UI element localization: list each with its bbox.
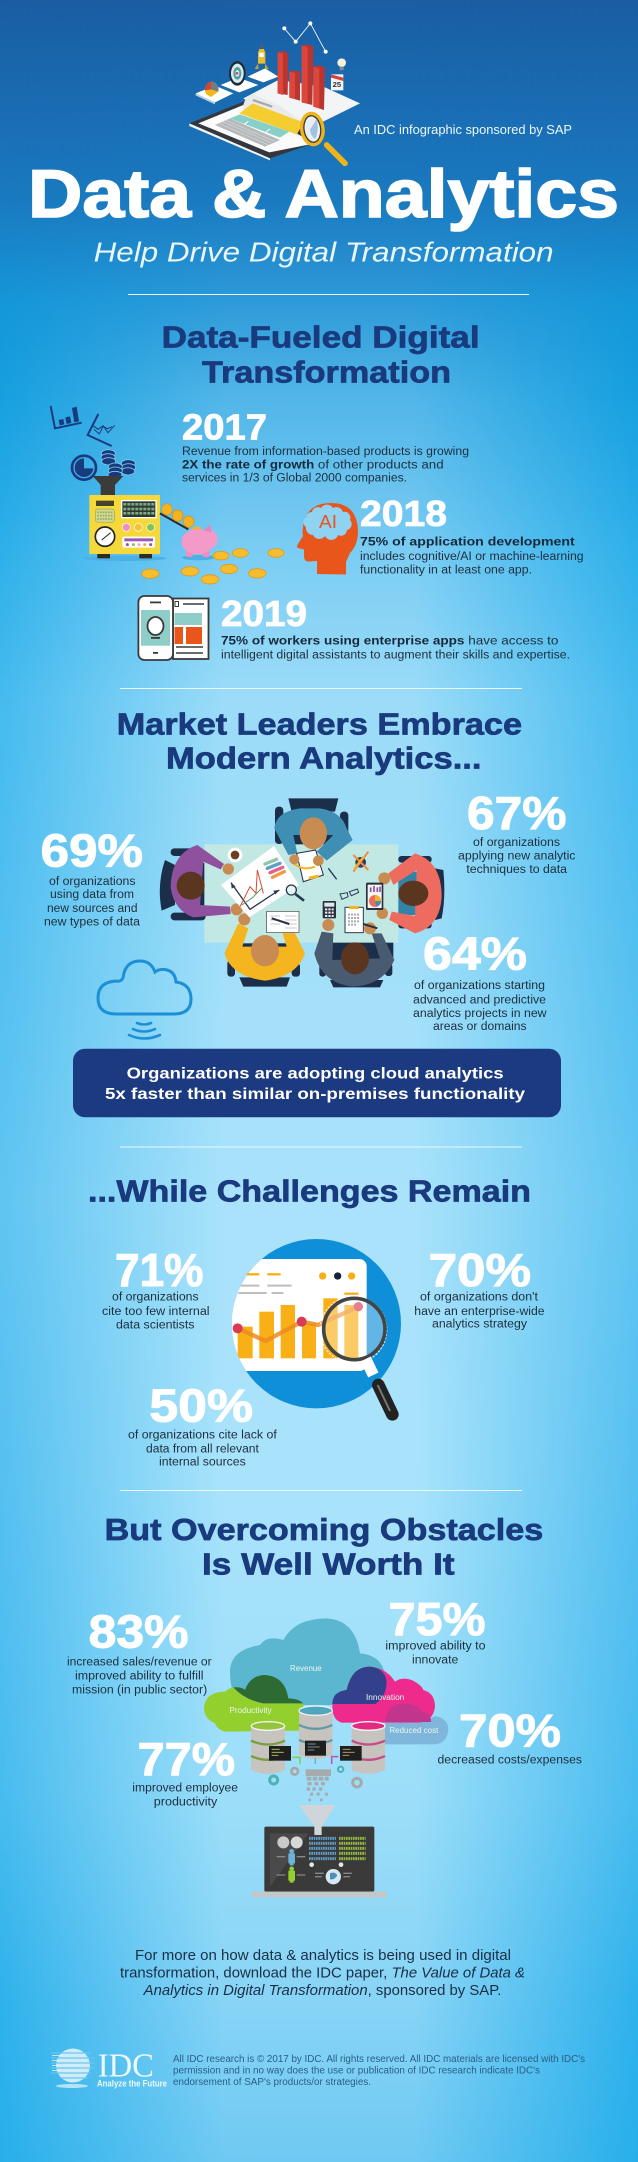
illustration: meeting table seen from above [160, 798, 444, 987]
stat: 83% [67, 1605, 212, 1696]
stat: 64%: 64% [423, 927, 527, 979]
text block: 2018 [360, 493, 584, 576]
stat: 69%: using data from [50, 889, 134, 901]
stat: 69%: of organizations [49, 876, 136, 888]
stat: 70% no strategy [414, 1244, 545, 1331]
database: middle [299, 1706, 332, 1759]
person: right, coral [377, 853, 444, 933]
heading: Market Leaders Embrace Modern Analytics [117, 706, 522, 775]
database: right [340, 1722, 385, 1774]
heading: But Overcoming Obstacles: But Overcoming Obstacles [105, 1512, 543, 1547]
closing call to action [120, 1948, 525, 1999]
text block: 2017: services in 1/3 of Global 2000 companies. [182, 473, 407, 485]
icon: coins on the floor [142, 549, 284, 584]
cloud: reduced cost: Reduced cost [389, 1726, 439, 1735]
stat: 50%: 50% [149, 1380, 253, 1432]
heading: But Overcoming Obstacles: Is Well Worth It [202, 1546, 455, 1581]
icon: cloud with wireless signal [98, 961, 191, 1038]
callout: cloud analytics: 5x faster than similar on-premises functionality [105, 1086, 525, 1103]
main title: Data & Analytics [28, 156, 619, 232]
heading: Market Leaders Embrace Modern Analytics: Modern Analytics... [166, 740, 482, 775]
cloud: reduced cost [385, 1716, 448, 1744]
cloud: innovation: Innovation [366, 1693, 404, 1702]
closing call to action: Analytics in Digital Transformation , sponsored by SAP. [143, 1983, 501, 1999]
bars [238, 1298, 358, 1358]
stat: 67% [458, 787, 576, 876]
chart on paper [221, 846, 299, 917]
tablet with charts [366, 883, 383, 910]
logo: IDC: Analyze the Future [97, 2079, 167, 2090]
text block: 2017 [182, 406, 469, 485]
person: bottom right, slate [314, 919, 394, 987]
legal notice [173, 2054, 585, 2088]
stat: 71%: of organizations [112, 1292, 199, 1304]
stat: 64%: areas or domains [433, 1021, 527, 1033]
laptop dashboard [252, 1827, 387, 1897]
stat: 75%: innovate [412, 1655, 458, 1667]
stat: 70% costs: decreased costs/expenses [438, 1755, 582, 1767]
stat: 69%: 69% [41, 825, 143, 877]
stat: 50% [128, 1380, 278, 1469]
stat: 70% no strategy: have an enterprise-wide [414, 1306, 545, 1318]
text block: 2018: functionality in at least one app. [360, 564, 532, 576]
header illustration: isometric tablet with charts: 25 [333, 80, 342, 89]
logo: IDC: IDC [98, 2048, 154, 2085]
icon: pie ring and coin stacks [72, 450, 136, 480]
text block: 2018: 2018 [360, 493, 447, 534]
stat: 69% [41, 825, 143, 929]
stat: 75%: 75% [389, 1593, 486, 1645]
stat: 83%: mission (in public sector) [72, 1684, 207, 1696]
illustration: benefit clouds feeding databases and laptop [204, 1618, 448, 1897]
heading: While Challenges Remain: ...While Challenges Remain [88, 1174, 531, 1209]
text block: 2019: 75% of workers using enterprise apps have access to [221, 635, 558, 647]
stat: 71% [102, 1244, 210, 1332]
notebook [267, 911, 299, 933]
calculator [323, 901, 336, 918]
stat: 77%: productivity [154, 1797, 218, 1809]
stat: 83%: improved ability to fulfill [75, 1671, 204, 1683]
callout: cloud analytics [73, 1049, 561, 1117]
trend line [238, 1307, 358, 1341]
stat: 50%: data from all relevant [146, 1444, 260, 1456]
icon: floating bar chart [51, 406, 82, 428]
connectors and gears [270, 1757, 361, 1787]
icon: AI head: AI [319, 512, 337, 532]
icon: data machine turning data into coins and piggy bank [51, 406, 284, 584]
stat: 77%: 77% [138, 1733, 235, 1785]
heading: Data-Fueled Digital Transformation: Data-Fueled Digital [162, 319, 480, 354]
icon: floating line chart [88, 414, 115, 446]
desk organiser [353, 852, 368, 872]
header illustration: isometric tablet with charts [189, 21, 360, 163]
stat: 75% [385, 1593, 486, 1667]
callout: cloud analytics: Organizations are adopting cloud analytics [127, 1065, 504, 1082]
stat: 64%: of organizations starting [414, 980, 545, 992]
stat: 75%: improved ability to [385, 1641, 486, 1653]
stat: 50%: of organizations cite lack of [128, 1430, 278, 1442]
magnifier [320, 1297, 392, 1414]
glasses [340, 889, 359, 899]
logo: IDC [51, 2048, 167, 2090]
stat: 67%: 67% [467, 787, 566, 839]
chart: analytics window under a magnifying glass [225, 1239, 401, 1414]
heading: Market Leaders Embrace Modern Analytics: Market Leaders Embrace [117, 706, 522, 741]
heading: Data-Fueled Digital Transformation: Transformation [202, 354, 451, 389]
stat: 50%: internal sources [159, 1457, 246, 1469]
legal notice: endorsement of SAP's products/or strategies. [173, 2077, 371, 2088]
text block: 2019 [221, 593, 570, 662]
stat: 77%: improved employee [132, 1783, 238, 1795]
table top [204, 844, 398, 943]
magnifier on table [286, 885, 304, 901]
person: bottom left, yellow [224, 913, 305, 987]
heading: But Overcoming Obstacles [105, 1512, 543, 1581]
person: top, blue [274, 798, 353, 882]
text block: 2019: intelligent digital assistants to augment their skills and expertise. [221, 650, 570, 662]
stat: 71%: 71% [115, 1244, 204, 1296]
legal notice: All IDC research is © 2017 by IDC. All rights reserved. All IDC materials are licensed with IDC's [173, 2054, 585, 2065]
text block: 2017: 2X the rate of growth of other products and [182, 460, 444, 472]
stat: 64% [413, 927, 547, 1033]
data pixels [306, 1769, 331, 1801]
coffee cup [228, 848, 242, 862]
stat: 70% no strategy: analytics strategy [432, 1319, 527, 1331]
heading: Data-Fueled Digital Transformation [162, 319, 480, 389]
stat: 70% no strategy: 70% [429, 1244, 531, 1296]
funnel [299, 1805, 336, 1835]
icon: phone and web page [138, 596, 208, 660]
cloud: revenue: Revenue [290, 1664, 322, 1673]
icon: AI head [297, 503, 358, 574]
legal notice: permission and in no way does the use or publication of IDC research indicate IDC's [173, 2065, 540, 2076]
subtitle: Help Drive Digital Transformation [94, 237, 554, 268]
clipboard right [345, 906, 377, 933]
stat: 71%: data scientists [116, 1320, 195, 1332]
cloud: revenue [230, 1618, 387, 1705]
text block: 2017: Revenue from information-based products is growing [182, 446, 469, 458]
cloud: productivity: Productivity [229, 1706, 272, 1715]
cloud: innovation [332, 1667, 435, 1723]
stat: 69%: new types of data [44, 917, 141, 929]
text block: 2018: includes cognitive/AI or machine-learning [360, 551, 584, 563]
text block: 2019: 2019 [221, 593, 307, 634]
closing call to action: For more on how data & analytics is being used in digital [135, 1948, 511, 1964]
stat: 69%: new sources and [47, 903, 138, 915]
database: left [251, 1722, 291, 1774]
sponsor line: An IDC infographic sponsored by SAP [354, 122, 572, 137]
stat: 83%: 83% [89, 1605, 188, 1657]
stat: 71%: cite too few internal [102, 1306, 210, 1318]
closing call to action: transformation, download the IDC paper, The Value of Data & [120, 1966, 525, 1982]
text block: 2018: 75% of application development [360, 537, 575, 549]
stat: 64%: analytics projects in new [413, 1008, 547, 1020]
stat: 70% costs: 70% [459, 1705, 561, 1757]
cloud: productivity [204, 1675, 303, 1732]
stat: 77% [132, 1733, 238, 1809]
stat: 67%: applying new analytic [458, 850, 576, 862]
stat: 83%: increased sales/revenue or [67, 1657, 212, 1669]
person: left, purple [160, 845, 243, 920]
icon: piggy bank [181, 524, 218, 560]
stat: 67%: techniques to data [466, 864, 568, 876]
stat: 70% costs [438, 1705, 582, 1767]
stat: 64%: advanced and predictive [413, 994, 546, 1006]
stat: 67%: of organizations [473, 837, 560, 849]
text block: 2017: 2017 [182, 406, 267, 447]
stat: 70% no strategy: of organizations don't [420, 1292, 539, 1304]
